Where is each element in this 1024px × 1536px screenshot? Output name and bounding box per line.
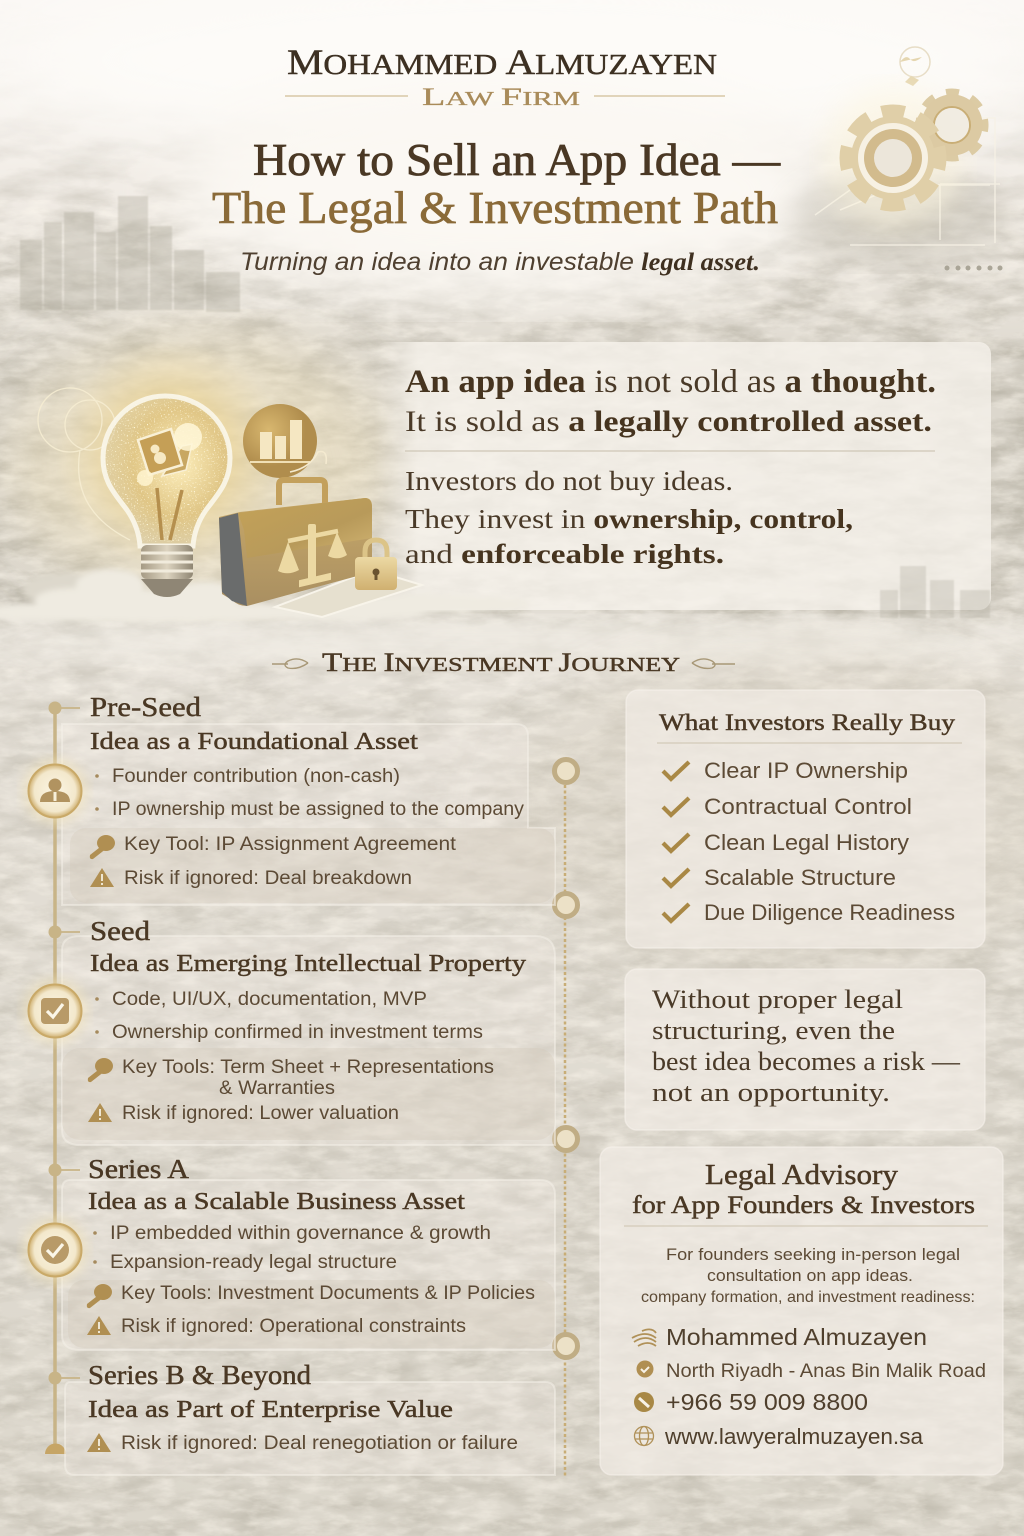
panel: seed: Key Tools: Term Sheet + Representations xyxy=(122,1057,494,1078)
panel: series b and beyond: Risk if ignored: Deal renegotiation or failure xyxy=(121,1433,518,1454)
logo: firm name: MOHAMMED ALMUZAYEN xyxy=(287,42,717,82)
title xyxy=(212,135,781,233)
icon: phone xyxy=(634,1392,654,1412)
icon: founder node xyxy=(23,759,87,823)
section heading: the investment journey: THE INVESTMENT JOURNEY xyxy=(322,648,680,677)
decoration: city skyline left xyxy=(20,196,240,312)
panel: legal advisory contact xyxy=(600,1147,1003,1475)
icon: padlock xyxy=(355,540,397,590)
panel: series a: Expansion-ready legal structure xyxy=(110,1252,397,1273)
icon: risk warning xyxy=(88,1103,112,1122)
panel: legal advisory contact: company formation, and investment readiness: xyxy=(641,1289,975,1306)
panel: what investors really buy: Clean Legal History xyxy=(704,830,909,855)
panel: series a: Key Tools: Investment Documents & IP Policies xyxy=(121,1283,535,1304)
panel: what investors really buy: Contractual Control xyxy=(704,794,912,819)
panel: hero statement: and enforceable rights. xyxy=(405,539,724,569)
panel: legal advisory contact: For founders seeking in-person legal xyxy=(666,1245,960,1264)
timeline: right dotted rail xyxy=(554,760,578,1478)
panel: seed: & Warranties xyxy=(219,1078,335,1099)
panel: hero statement xyxy=(375,342,991,610)
panel: series a: IP embedded within governance & growth xyxy=(110,1223,491,1244)
illustration: cloud bed xyxy=(0,569,530,622)
panel: pre-seed xyxy=(62,692,555,905)
icon: risk warning xyxy=(87,1316,111,1335)
panel: pre-seed: Pre-Seed xyxy=(90,692,202,722)
panel: series a xyxy=(62,1154,555,1350)
panel: series a: Risk if ignored: Operational constraints xyxy=(121,1316,466,1337)
panel: series b and beyond xyxy=(65,1360,555,1475)
panel: hero statement: An app idea is not sold as a thought. xyxy=(405,364,936,400)
panel: hero statement: They invest in ownership, control, xyxy=(405,504,853,534)
panel: legal advisory contact: www.lawyeralmuzayen.sa xyxy=(664,1424,924,1449)
panel: warning statement: structuring, even the xyxy=(652,1016,895,1045)
icon: risk warning xyxy=(87,1433,111,1452)
panel: pre-seed: Key Tool: IP Assignment Agreement xyxy=(124,834,457,855)
panel: legal advisory contact: consultation on app ideas. xyxy=(707,1266,913,1285)
panel: seed: Seed xyxy=(90,916,151,946)
icon: key tool xyxy=(90,835,115,859)
panel: pre-seed: Founder contribution (non-cash) xyxy=(112,766,400,787)
icon: location xyxy=(636,1360,654,1378)
panel: pre-seed: Risk if ignored: Deal breakdown xyxy=(124,868,412,889)
illustration: light bulb xyxy=(38,360,260,597)
panel: seed: Risk if ignored: Lower valuation xyxy=(122,1103,399,1124)
icon: key tools xyxy=(88,1058,113,1082)
icon: checkbox node xyxy=(23,979,87,1043)
panel: series a: Idea as a Scalable Business Asset xyxy=(88,1189,465,1215)
panel: series b and beyond: Idea as Part of Enterprise Value xyxy=(88,1397,453,1423)
panel: warning statement: Without proper legal xyxy=(652,985,903,1014)
panel: seed: Ownership confirmed in investment terms xyxy=(112,1022,483,1043)
panel: pre-seed: IP ownership must be assigned to the company xyxy=(112,799,525,820)
panel: warning statement xyxy=(625,969,985,1130)
panel: warning statement: best idea becomes a risk — xyxy=(652,1047,961,1076)
panel: legal advisory contact: Mohammed Almuzayen xyxy=(666,1324,927,1350)
icon: gears xyxy=(823,88,982,228)
logo: firm name xyxy=(285,42,725,111)
logo: firm name: L AW F IRM xyxy=(422,84,580,111)
decoration: circuit lines and dots right xyxy=(815,47,1002,270)
icon: check node xyxy=(23,1218,87,1282)
panel: warning statement: not an opportunity. xyxy=(652,1078,890,1107)
panel: legal advisory contact: +966 59 009 8800 xyxy=(666,1389,868,1415)
panel: pre-seed: Idea as a Foundational Asset xyxy=(90,729,418,755)
icon: globe xyxy=(634,1426,654,1446)
subtitle: Turning an idea into an investable legal asset. xyxy=(240,248,760,276)
panel: what investors really buy xyxy=(626,690,985,948)
panel: what investors really buy: Clear IP Ownership xyxy=(704,758,908,783)
icon: key tools xyxy=(87,1284,112,1308)
panel: seed: Idea as Emerging Intellectual Property xyxy=(90,951,526,977)
title: How to Sell an App Idea — xyxy=(253,135,781,185)
panel: seed xyxy=(62,916,555,1145)
panel: what investors really buy: Scalable Structure xyxy=(704,865,896,890)
icon: check marks xyxy=(663,762,689,921)
icon: risk warning xyxy=(90,868,114,887)
panel: legal advisory contact: for App Founders & Investors xyxy=(632,1192,975,1219)
icon: firm logo xyxy=(632,1329,656,1346)
panel: hero statement: Investors do not buy ideas. xyxy=(405,466,733,496)
panel: hero statement: It is sold as a legally controlled asset. xyxy=(405,405,932,438)
panel: series a: Series A xyxy=(88,1154,190,1184)
panel: what investors really buy: What Investors Really Buy xyxy=(659,710,955,736)
panel: series b and beyond: Series B & Beyond xyxy=(88,1360,312,1390)
decoration: hero city right xyxy=(880,566,990,618)
title: The Legal & Investment Path xyxy=(212,183,778,233)
illustration: document under briefcase xyxy=(275,570,422,617)
panel: seed: Code, UI/UX, documentation, MVP xyxy=(112,989,427,1010)
illustration: briefcase with scales xyxy=(219,480,372,606)
panel: legal advisory contact: North Riyadh - Anas Bin Malik Road xyxy=(666,1360,986,1382)
illustration: bar chart badge xyxy=(243,404,326,478)
panel: what investors really buy: Due Diligence Readiness xyxy=(704,900,955,925)
timeline: left rail xyxy=(45,702,80,1454)
panel: legal advisory contact: Legal Advisory xyxy=(705,1160,898,1191)
